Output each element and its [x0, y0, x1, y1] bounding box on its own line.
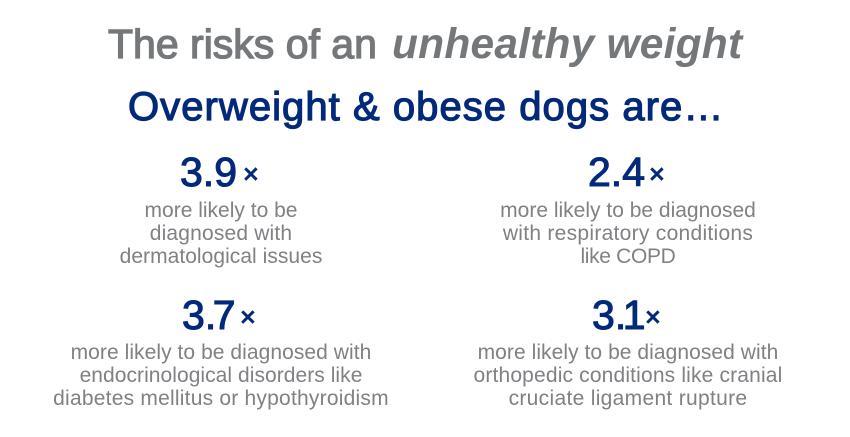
description: with respiratory conditions	[503, 222, 753, 245]
description: diabetes mellitus or hypothyroidism	[53, 387, 389, 410]
multiplier sign: ×	[649, 159, 665, 189]
number: 2.4	[588, 149, 645, 195]
multiplier sign: ×	[243, 159, 259, 189]
number: 3.7	[182, 292, 236, 338]
multiplier sign: ×	[645, 302, 661, 332]
description	[120, 199, 322, 268]
number: 3.1	[592, 292, 646, 338]
description	[474, 341, 782, 410]
description: dermatological issues	[120, 245, 322, 268]
stat: endocrinological	[53, 292, 389, 410]
description	[53, 341, 389, 410]
description: cruciate ligament rupture	[509, 387, 747, 410]
number: 3.9	[180, 149, 237, 195]
description: more likely to be diagnosed	[500, 199, 756, 222]
subtitle: Overweight & obese dogs are…	[128, 85, 724, 129]
stat: dermatological	[120, 149, 322, 268]
title	[108, 21, 744, 68]
title: unhealthy weight	[392, 21, 742, 68]
description: more likely to be diagnosed with	[478, 341, 778, 364]
title: The risks of an	[108, 21, 377, 67]
multiplier sign: ×	[240, 302, 256, 332]
description: like COPD	[580, 245, 676, 268]
description: diagnosed with	[150, 222, 292, 245]
description	[500, 199, 756, 268]
stat: orthopedic	[474, 292, 782, 410]
description: orthopedic conditions like cranial	[474, 364, 782, 387]
stat: respiratory	[500, 149, 756, 268]
description: endocrinological disorders like	[80, 364, 362, 387]
description: more likely to be diagnosed with	[71, 341, 371, 364]
description: more likely to be	[145, 199, 297, 222]
